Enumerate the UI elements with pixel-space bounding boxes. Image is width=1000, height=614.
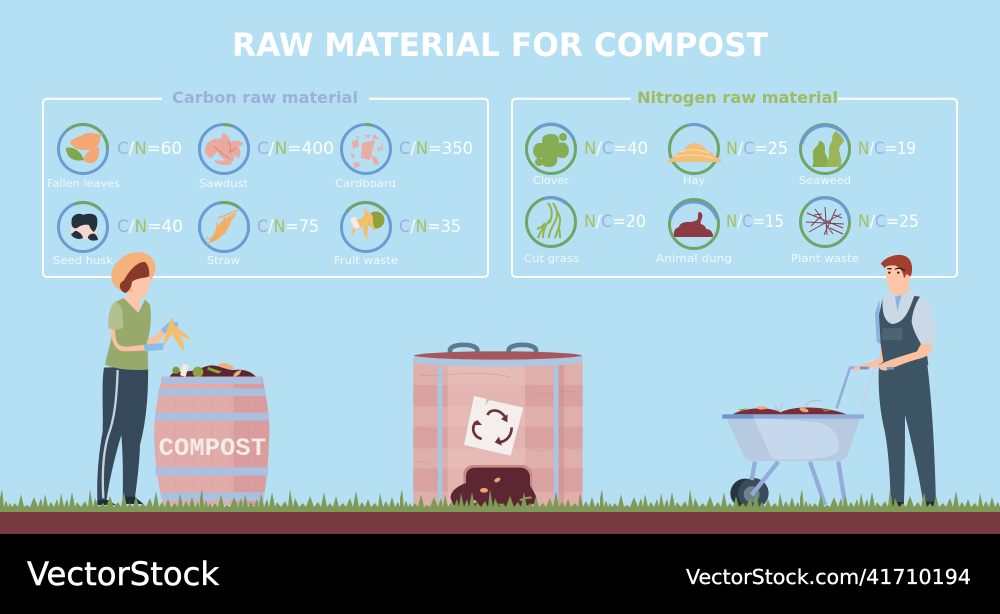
hat [104,244,163,300]
man figure [853,255,936,508]
item: straw: C/N=75 [257,217,319,236]
item: animal dung: N/C=15 [726,212,784,231]
neck [892,282,909,297]
hair [120,262,149,293]
item: cut grass [524,198,646,265]
sleeve back [875,300,882,345]
item: fallen leaves [47,124,182,190]
item: hay: Hay [683,175,705,187]
grass strip [0,488,1000,514]
item: animal dung [656,200,784,265]
compost opening [451,465,537,509]
title: RAW MATERIAL FOR COMPOST [232,26,768,64]
compost pile in barrel [169,363,257,378]
woman figure [97,244,192,505]
item: sawdust: Sawdust [199,178,248,190]
item: plant waste: N/C=25 [858,212,919,231]
bin rim [413,356,583,367]
bib [879,296,928,365]
barrow tub [726,418,861,461]
watermark logo: VectorStock [27,555,219,593]
gloves [143,322,178,351]
item: plant waste: Plant waste [791,253,859,265]
arms [853,343,933,371]
bin handles [450,345,536,356]
compost barrel [154,363,269,505]
panel: nitrogen raw material [512,88,957,277]
item: clover [526,124,648,187]
item: seaweed [799,124,916,187]
recycle poster [464,396,523,456]
compost bin [413,345,583,512]
shirt [880,290,936,345]
item: cardboard [335,124,473,190]
collar tie [895,295,902,312]
item: fallen leaves: Fallen leaves [47,178,120,190]
barrel label: COMPOST [159,434,266,463]
item: clover: N/C=40 [584,139,648,158]
banana peel [163,318,192,351]
grips [860,364,894,372]
item: seed husk: C/N=40 [117,217,183,236]
wheel [730,478,769,509]
item: animal dung: Animal dung [656,253,732,265]
item: seed husk: Seed husk [53,255,114,267]
footer bar [0,534,1000,614]
item: sawdust: C/N=400 [257,139,334,158]
face [886,264,910,294]
item: straw: Straw [207,255,240,267]
item: plant waste [791,198,919,265]
watermark id: VectorStock.com/41710194 [686,565,971,589]
barrel hoops [155,377,268,501]
hair [881,255,912,278]
item: straw [200,202,319,267]
face [132,277,151,298]
brows and eyes [887,268,905,271]
legs [97,366,148,505]
item: fruit waste: C/N=35 [399,217,461,236]
item: fruit waste: Fruit waste [334,255,398,267]
wheelbarrow [722,368,893,509]
item: cut grass: N/C=20 [584,212,646,231]
item: cut grass: Cut grass [524,253,579,265]
item: seed husk [53,202,183,267]
heading: nitrogen: Nitrogen raw material [637,88,838,107]
item: seaweed: N/C=19 [858,139,916,158]
neck [124,290,140,313]
ground soil [0,512,1000,534]
panel: carbon raw material [43,88,488,277]
item: cardboard: Cardboard [335,178,396,190]
heading: carbon: Carbon raw material [172,88,358,107]
item: clover: Clover [533,175,570,187]
item: seaweed: Seaweed [799,175,851,187]
item: sawdust [199,124,334,190]
item: cardboard: C/N=350 [399,139,473,158]
item: hay: N/C=25 [726,139,788,158]
item: fallen leaves: C/N=60 [117,139,182,158]
boots [887,502,934,508]
bin straps [438,367,558,502]
barrow frame [752,462,845,505]
barrow load [733,400,847,414]
item: fruit waste [334,202,461,267]
shirt [105,298,151,370]
overalls lower [879,358,936,503]
item: hay [666,124,788,187]
